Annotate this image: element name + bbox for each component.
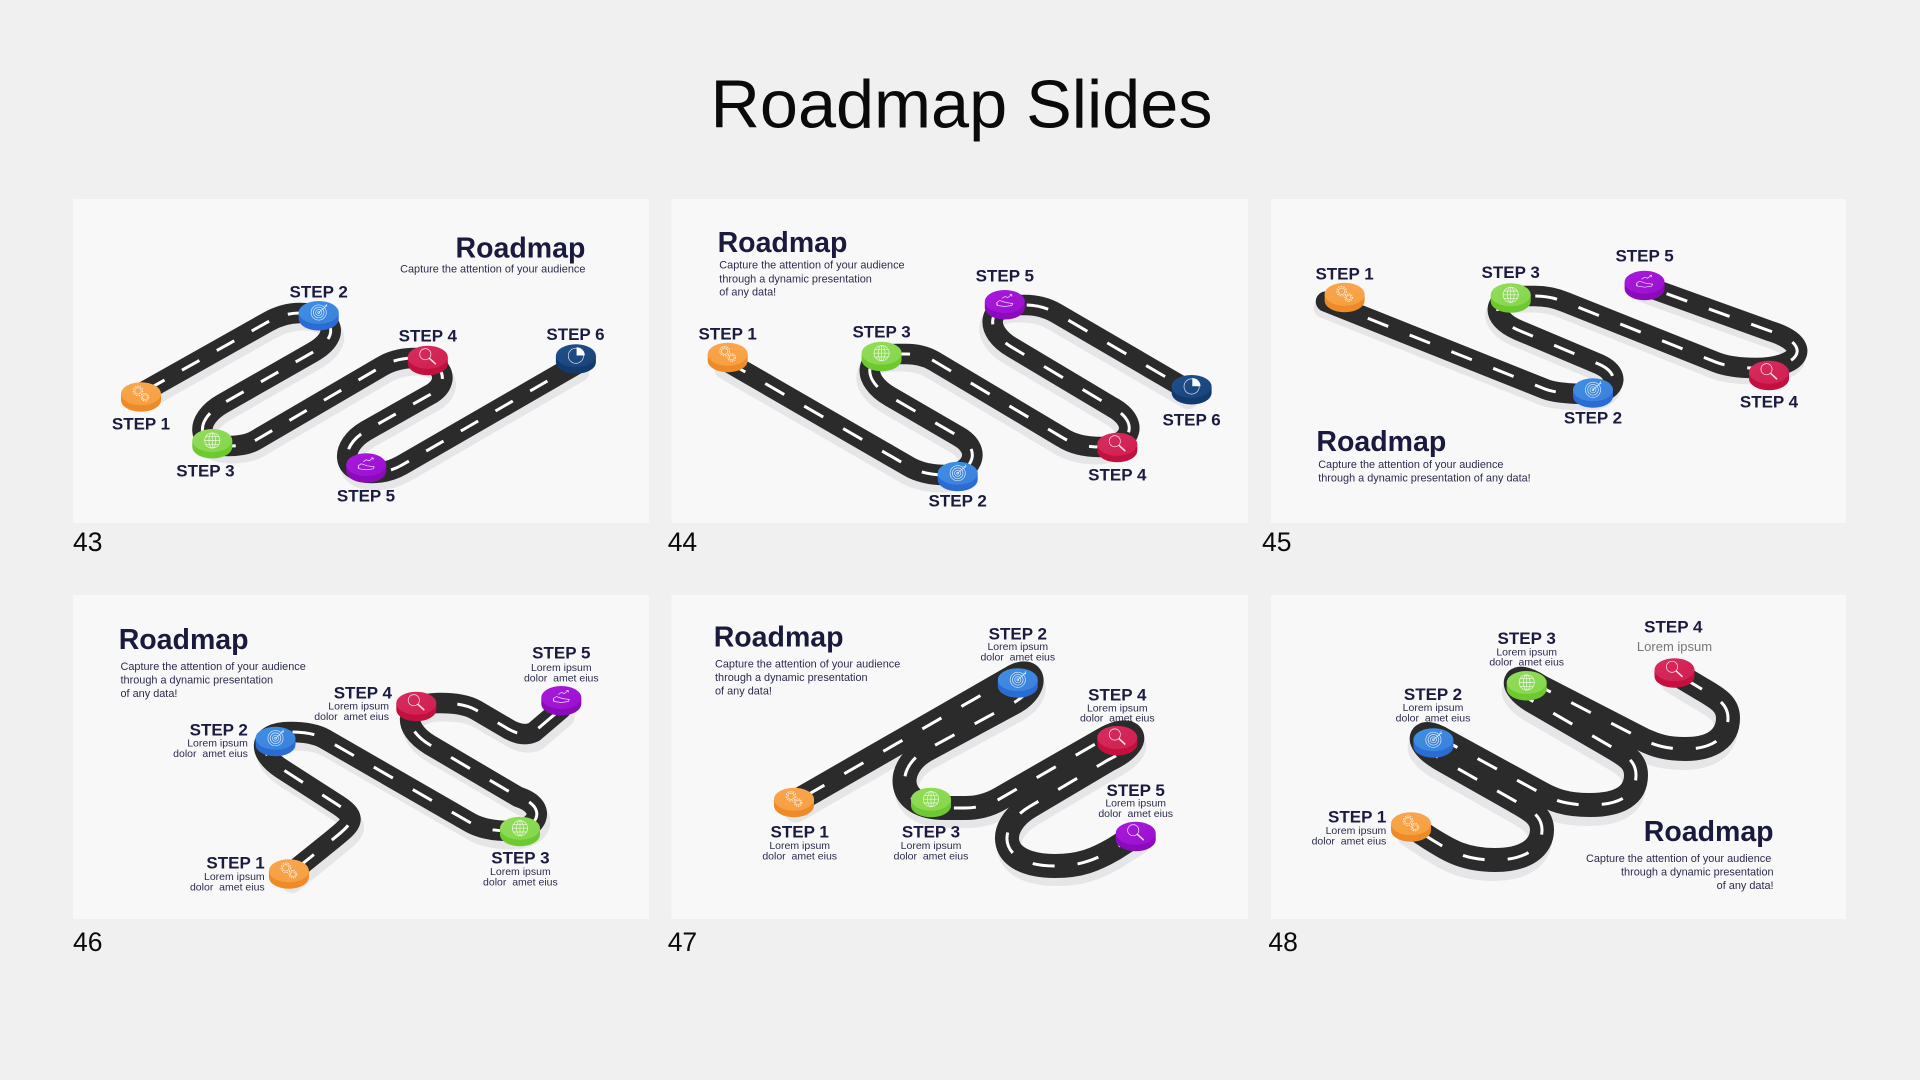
label: step 1: STEP 1 — [112, 414, 170, 433]
label: step 1: STEP 1 — [771, 823, 829, 842]
description: slide 47: through a dynamic presentation — [715, 672, 868, 684]
description: slide 44: of any data! — [719, 287, 776, 299]
description: slide 46: of any data! — [120, 688, 177, 700]
marker: step 2 — [998, 668, 1038, 698]
description: slide 48: Capture the attention of your audience — [1586, 853, 1771, 865]
marker: step 1 — [1325, 283, 1365, 312]
marker: step 3 — [862, 342, 902, 371]
label: step 5: STEP 5 — [1615, 246, 1674, 265]
sublabel: step 5: dolor amet eius — [1098, 808, 1173, 820]
panel: slide 46 — [73, 595, 649, 919]
label: step 4: STEP 4 — [1088, 466, 1147, 485]
marker: step 5 — [1116, 822, 1156, 851]
slide number 45: 45 — [1262, 527, 1291, 557]
road: slide 47 — [794, 673, 1138, 874]
sublabel: step 2: dolor amet eius — [980, 652, 1055, 664]
label: step 5: STEP 5 — [976, 267, 1034, 286]
description: slide 44: Capture the attention of your audience — [719, 260, 905, 272]
road: slide 44 — [725, 305, 1191, 482]
label: step 6: STEP 6 — [1162, 410, 1221, 429]
marker: step 4 — [396, 692, 436, 721]
panel: slide 44 — [672, 199, 1248, 523]
label: step 3: STEP 3 — [1482, 263, 1540, 282]
marker: step 4 — [408, 346, 448, 375]
label: step 2: STEP 2 — [1564, 408, 1622, 427]
marker: step 6 — [1172, 375, 1212, 404]
slide number 44: 44 — [668, 527, 697, 557]
marker: step 1 — [121, 382, 161, 412]
sublabel: step 2: Lorem ipsum — [187, 738, 248, 750]
title: Roadmap Slides — [710, 67, 1212, 143]
label: step 1: STEP 1 — [699, 324, 757, 343]
sublabel: step 3: Lorem ipsum — [490, 866, 551, 878]
marker: step 5 — [1625, 271, 1665, 300]
label: step 2: STEP 2 — [989, 624, 1047, 643]
sublabel: step 1: Lorem ipsum — [1326, 825, 1386, 837]
description: slide 44: through a dynamic presentation — [719, 273, 872, 285]
label: step 4: STEP 4 — [1644, 618, 1703, 637]
heading: slide 43: Roadmap — [456, 233, 585, 265]
label: step 4: STEP 4 — [1740, 393, 1799, 412]
slide number 43: 43 — [73, 527, 102, 557]
description: slide 47: of any data! — [715, 685, 772, 697]
marker: step 3 — [192, 429, 232, 458]
marker: step 4 — [1097, 726, 1137, 756]
panel: slide 48 — [1271, 595, 1846, 919]
slide number 46: 46 — [73, 927, 102, 957]
label: step 2: STEP 2 — [929, 492, 987, 511]
marker: step 5 — [985, 290, 1025, 320]
label: step 3: STEP 3 — [902, 823, 960, 842]
sublabel: step 2: dolor amet eius — [1396, 712, 1470, 724]
marker: step 3 — [1491, 283, 1531, 313]
marker: step 2 — [299, 301, 339, 330]
label: step 5: STEP 5 — [532, 644, 590, 663]
sublabel: step 3: dolor amet eius — [483, 877, 558, 889]
label: step 2: STEP 2 — [1404, 685, 1462, 704]
sublabel: step 1: dolor amet eius — [762, 851, 837, 863]
heading: slide 47: Roadmap — [714, 622, 844, 654]
description: slide 48: of any data! — [1717, 880, 1774, 892]
heading: slide 45: Roadmap — [1316, 426, 1446, 458]
description: slide 46: through a dynamic presentation — [120, 675, 273, 687]
marker: step 2 — [256, 727, 296, 756]
sublabel: step 4: Lorem ipsum — [1637, 639, 1712, 654]
description: slide 45: through a dynamic presentation of any data! — [1318, 472, 1531, 484]
marker: step 2 — [938, 462, 978, 491]
sublabel: step 5: dolor amet eius — [524, 673, 599, 685]
marker: step 5 — [541, 686, 581, 716]
road: slide 46 — [264, 703, 564, 883]
label: step 6: STEP 6 — [546, 325, 605, 344]
sublabel: step 1: dolor amet eius — [1312, 835, 1386, 847]
sublabel: step 4: dolor amet eius — [314, 711, 389, 723]
sublabel: step 3: dolor amet eius — [1489, 657, 1564, 669]
sublabel: step 1: Lorem ipsum — [769, 840, 830, 852]
label: step 2: STEP 2 — [290, 282, 348, 301]
marker: step 3 — [911, 788, 951, 817]
label: step 1: STEP 1 — [206, 853, 265, 872]
description: slide 45: Capture the attention of your audience — [1318, 459, 1503, 471]
marker: step 4 — [1097, 433, 1137, 462]
label: step 4: STEP 4 — [334, 684, 393, 703]
heading: slide 44: Roadmap — [718, 227, 847, 259]
marker: step 4 — [1749, 361, 1789, 390]
sublabel: step 3: dolor amet eius — [894, 851, 968, 863]
marker: step 2 — [1413, 728, 1453, 758]
sublabel: step 2: Lorem ipsum — [987, 641, 1048, 653]
sublabel: step 4: Lorem ipsum — [1087, 702, 1148, 714]
marker: step 1 — [269, 859, 309, 889]
slide number 48: 48 — [1268, 927, 1298, 957]
label: step 5: STEP 5 — [1107, 781, 1165, 800]
marker: step 1 — [708, 343, 748, 372]
marker: step 6 — [556, 344, 596, 374]
sublabel: step 5: Lorem ipsum — [531, 662, 592, 674]
marker: step 2 — [1573, 378, 1613, 408]
sublabel: step 3: Lorem ipsum — [1496, 646, 1557, 658]
marker: step 5 — [346, 453, 386, 483]
marker: step 3 — [1507, 671, 1547, 700]
marker: step 4 — [1654, 658, 1694, 688]
panel: slide 45 — [1271, 199, 1846, 523]
description: slide 46: Capture the attention of your audience — [120, 661, 306, 673]
label: step 1: STEP 1 — [1315, 264, 1374, 283]
road: slide 48 — [1409, 673, 1728, 869]
label: step 2: STEP 2 — [190, 721, 248, 740]
sublabel: step 2: Lorem ipsum — [1403, 702, 1463, 714]
sublabel: step 1: dolor amet eius — [190, 881, 265, 893]
description: slide 47: Capture the attention of your audience — [715, 658, 900, 670]
heading: slide 46: Roadmap — [119, 624, 249, 656]
label: step 3: STEP 3 — [176, 462, 235, 481]
sublabel: step 4: Lorem ipsum — [328, 700, 389, 712]
description: slide 43: Capture the attention of your audience — [400, 263, 585, 275]
sublabel: step 2: dolor amet eius — [173, 748, 248, 760]
label: step 3: STEP 3 — [852, 323, 911, 342]
heading: slide 48: Roadmap — [1644, 816, 1774, 848]
label: step 3: STEP 3 — [1498, 629, 1556, 648]
panel: slide 43 — [73, 199, 649, 523]
label: step 4: STEP 4 — [399, 327, 457, 346]
marker: step 3 — [500, 817, 540, 846]
label: step 1: STEP 1 — [1328, 808, 1386, 827]
sublabel: step 3: Lorem ipsum — [901, 840, 961, 852]
slide number 47: 47 — [668, 927, 697, 957]
sublabel: step 4: dolor amet eius — [1080, 713, 1155, 725]
marker: step 1 — [1391, 812, 1431, 842]
marker: step 1 — [774, 788, 814, 817]
label: step 4: STEP 4 — [1088, 686, 1147, 705]
sublabel: step 5: Lorem ipsum — [1105, 798, 1166, 810]
panel: slide 47 — [672, 595, 1248, 919]
road: slide 45 — [1324, 286, 1797, 400]
label: step 5: STEP 5 — [337, 487, 395, 506]
road: slide 43 — [141, 313, 579, 480]
sublabel: step 1: Lorem ipsum — [204, 871, 265, 883]
description: slide 48: through a dynamic presentation — [1621, 867, 1774, 879]
label: step 3: STEP 3 — [491, 848, 550, 867]
